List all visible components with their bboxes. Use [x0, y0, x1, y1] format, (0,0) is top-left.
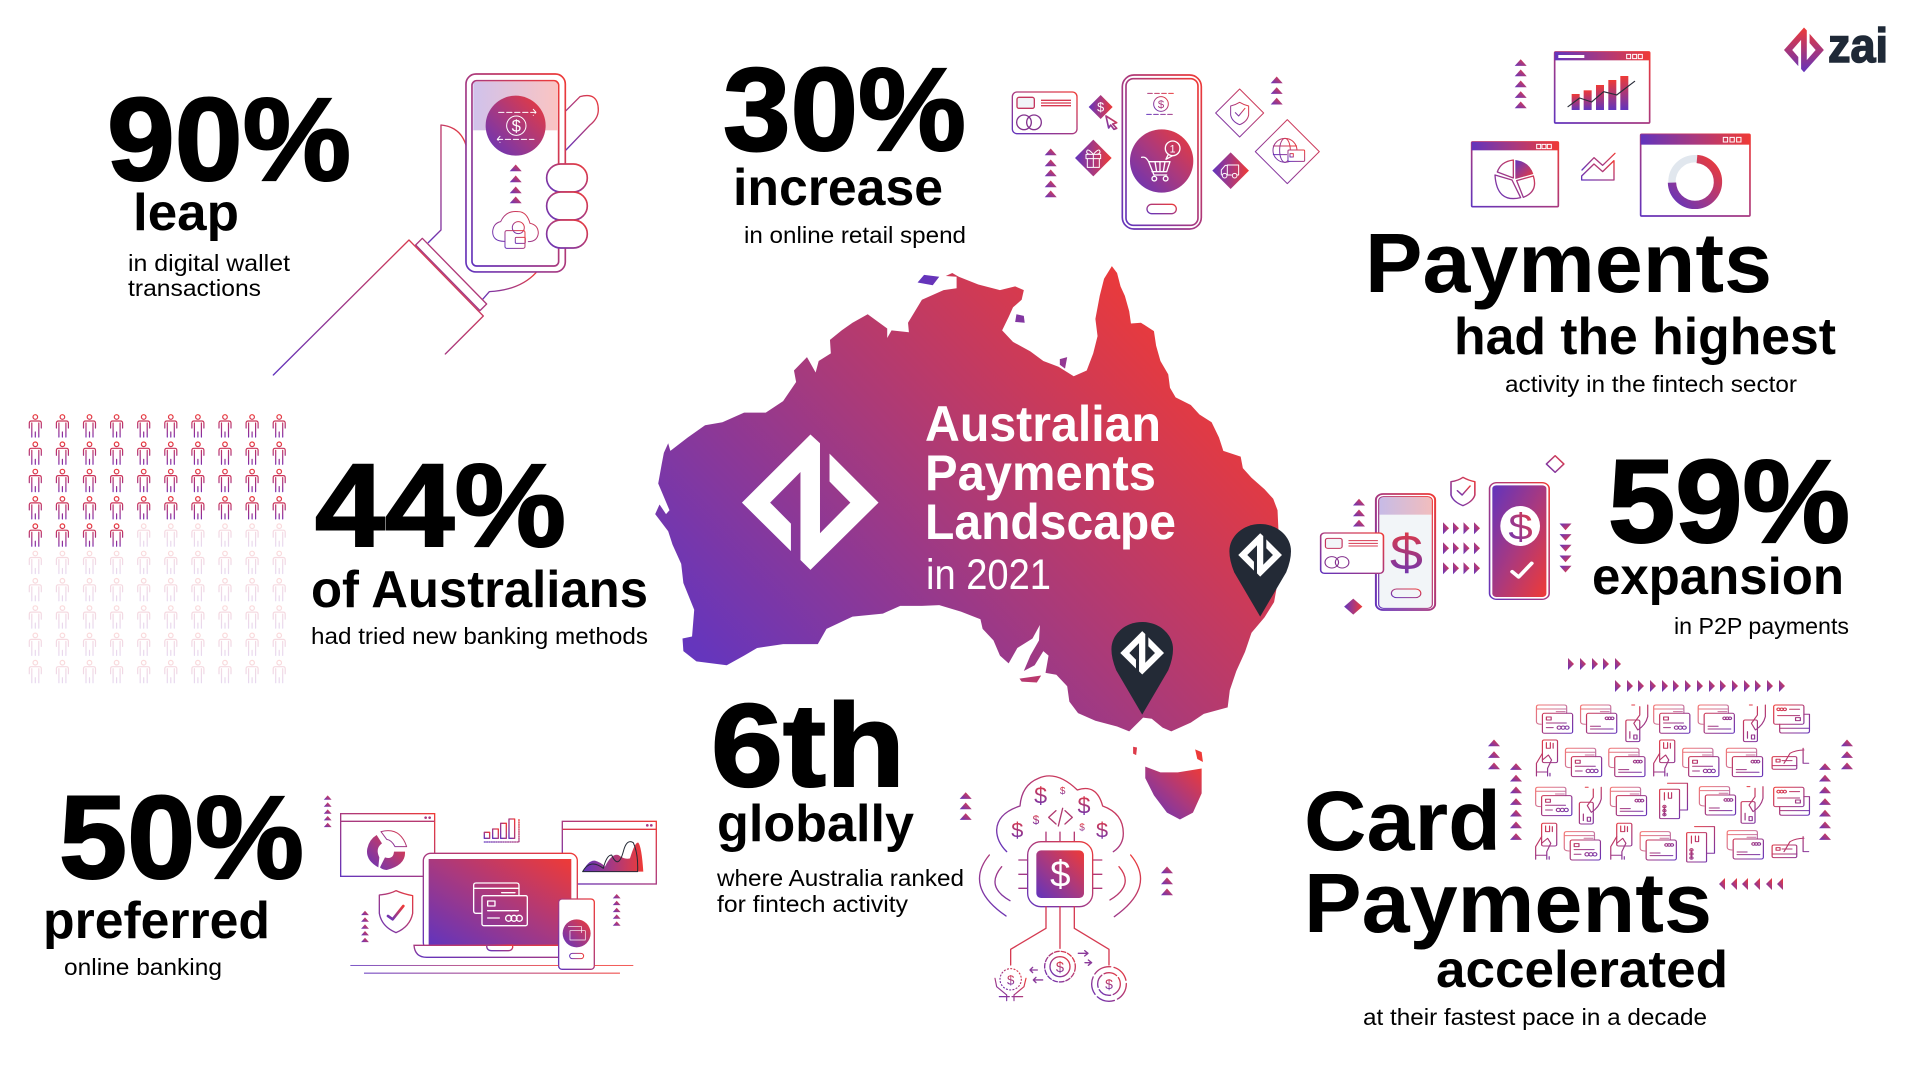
- title line 2: Payments: [925, 445, 1156, 501]
- phone: [466, 74, 565, 272]
- triangles: card right: [1819, 740, 1853, 840]
- cloud: $: [1077, 792, 1090, 818]
- phone: [1122, 75, 1201, 229]
- row 4: [1536, 823, 1809, 862]
- number: 50%: [59, 772, 304, 904]
- illustration: P2P phones: [1321, 456, 1564, 615]
- illustration: payments dashboards: [1472, 52, 1750, 216]
- chip: [1018, 832, 1102, 907]
- triangles: fintech: [960, 792, 1173, 895]
- description: at their fastest pace in a decade: [1363, 1004, 1707, 1030]
- pie chart window: [1472, 142, 1558, 207]
- gift diamond: [1075, 140, 1112, 176]
- heading line 2: Payments: [1304, 856, 1712, 950]
- number: 44%: [315, 440, 566, 572]
- number: 6th: [711, 680, 905, 812]
- description: transactions: [128, 275, 261, 301]
- signal arcs: [979, 855, 1141, 917]
- illustration: fintech chip: [979, 776, 1141, 1001]
- phone: [559, 899, 594, 969]
- receiver phone: [1490, 483, 1549, 599]
- dollar circle icon: [486, 96, 546, 156]
- credit card: [1321, 533, 1383, 573]
- people grid: 44 of 100: [29, 415, 285, 683]
- subheading: accelerated: [1436, 941, 1728, 999]
- outline diamond: [1546, 456, 1564, 472]
- stat: 59% expansion: [1592, 436, 1850, 639]
- map of Australia: [655, 266, 1291, 819]
- heading line 1: Card: [1304, 774, 1501, 868]
- heading: leap: [133, 184, 239, 242]
- row 3: [29, 469, 285, 492]
- cloud: $: [1033, 813, 1040, 827]
- illustration: online retail phone: [1012, 75, 1319, 229]
- receiver phone: $: [1508, 506, 1533, 548]
- title line 1: Australian: [925, 396, 1161, 452]
- stat: payments highest activity: [1365, 216, 1836, 397]
- stat: 6th globally: [711, 680, 964, 917]
- cloud: $: [1079, 823, 1085, 834]
- row 3: [1536, 783, 1809, 824]
- triangles: banking: [324, 795, 621, 942]
- trend icon: [1582, 153, 1615, 180]
- row 2: [29, 442, 285, 464]
- gear icon: [1030, 951, 1092, 983]
- cart circle: [1130, 129, 1193, 193]
- hands icon: [995, 969, 1026, 1001]
- cloud: $: [1096, 817, 1108, 842]
- subheading: had the highest: [1454, 308, 1836, 366]
- row 5 partial: [29, 524, 285, 546]
- arrows: card top: [1568, 658, 1785, 692]
- title line 3: Landscape: [925, 494, 1176, 550]
- description: activity in the fintech sector: [1505, 371, 1797, 397]
- dollar diamond: $: [1097, 101, 1104, 115]
- credit card: [1012, 92, 1077, 134]
- small dollar icon: [1147, 93, 1175, 114]
- truck diamond: [1212, 152, 1249, 189]
- hands dollar: $: [1007, 973, 1015, 988]
- illustration: card icon grid: [1536, 705, 1809, 862]
- area chart window: [562, 821, 656, 884]
- laptop: [414, 853, 583, 957]
- stat: 90% leap: [107, 74, 351, 301]
- triangles: retail left: [1045, 148, 1057, 197]
- gear dollar: $: [1056, 960, 1064, 976]
- shield: [1451, 477, 1475, 506]
- title line 4: in 2021: [926, 551, 1051, 599]
- coin dollar: $: [1105, 976, 1113, 992]
- number: 90%: [107, 74, 351, 206]
- triangles: P2P down: [1560, 524, 1572, 572]
- hand and sleeve: [273, 96, 598, 375]
- triangles: payments: [1515, 59, 1527, 108]
- coin icon: [1092, 967, 1126, 1001]
- description: online banking: [64, 954, 222, 980]
- description: in P2P payments: [1674, 613, 1849, 639]
- zai wordmark: zai: [1828, 20, 1888, 73]
- fingers: [547, 164, 587, 248]
- stat: card payments accelerated: [1304, 774, 1728, 1030]
- zai brand logo: [1784, 20, 1888, 73]
- number: 30%: [723, 44, 966, 176]
- connectors: [1011, 907, 1109, 965]
- row 2: [1536, 740, 1809, 777]
- description: had tried new banking methods: [311, 623, 648, 649]
- small dollar icon: $: [1158, 99, 1165, 111]
- centre logo: [742, 434, 879, 570]
- heading: globally: [717, 795, 914, 853]
- map title: [925, 396, 1176, 599]
- stat: 44% of Australians: [311, 440, 648, 649]
- row 1: [1536, 705, 1809, 742]
- shield: [379, 891, 413, 933]
- stat: 30% increase: [723, 44, 966, 248]
- zai mark: [1784, 27, 1824, 72]
- chip: $: [1050, 854, 1071, 895]
- dollar circle icon: $: [512, 117, 521, 136]
- triangles: P2P up: [1353, 499, 1365, 526]
- mainland: [655, 266, 1281, 731]
- dollar diamond: [1089, 95, 1113, 119]
- shield diamond: [1216, 89, 1264, 137]
- heading: preferred: [43, 892, 270, 950]
- cart circle: 1: [1170, 143, 1176, 155]
- chevrons: P2P: [1443, 522, 1480, 574]
- illustration: hand holding phone: [273, 74, 598, 375]
- number: 59%: [1608, 436, 1850, 568]
- bar chart window: [1555, 52, 1650, 123]
- sender phone: [1376, 494, 1435, 610]
- Tasmania: [1145, 767, 1202, 819]
- heading: expansion: [1592, 548, 1844, 606]
- heading: increase: [733, 159, 943, 217]
- islands: [918, 275, 1203, 762]
- donut window: [341, 814, 435, 876]
- donut window: [1641, 134, 1750, 216]
- faded rows: [29, 551, 285, 683]
- triangles: card left: [1488, 740, 1522, 840]
- filled diamond: [1344, 599, 1362, 615]
- row 4: [29, 497, 285, 519]
- heading: of Australians: [311, 561, 648, 619]
- base lines: [350, 965, 633, 974]
- heading: Payments: [1365, 216, 1772, 310]
- description: for fintech activity: [717, 891, 909, 917]
- bar icon: [484, 819, 519, 842]
- triangles: hand: [510, 164, 522, 203]
- cursor: [1106, 116, 1117, 129]
- description: in digital wallet: [128, 250, 291, 276]
- stat: 50% preferred: [43, 772, 304, 980]
- cloud: [997, 776, 1123, 852]
- description: where Australia ranked: [716, 865, 964, 891]
- sender phone: $: [1390, 524, 1423, 580]
- illustration: online banking laptop: [341, 814, 656, 974]
- description: in online retail spend: [744, 222, 966, 248]
- cloud: $: [1060, 786, 1066, 797]
- cloud: $: [1034, 782, 1047, 808]
- globe diamond: [1255, 120, 1319, 184]
- arrows: card bottom: [1719, 878, 1783, 890]
- row 1: [29, 415, 285, 437]
- cloud: $: [1011, 817, 1023, 842]
- wallet in cloud icon: [493, 211, 538, 248]
- triangles: retail right: [1271, 76, 1283, 104]
- pin: Sydney: [1229, 524, 1291, 617]
- pin: Melbourne: [1111, 622, 1173, 715]
